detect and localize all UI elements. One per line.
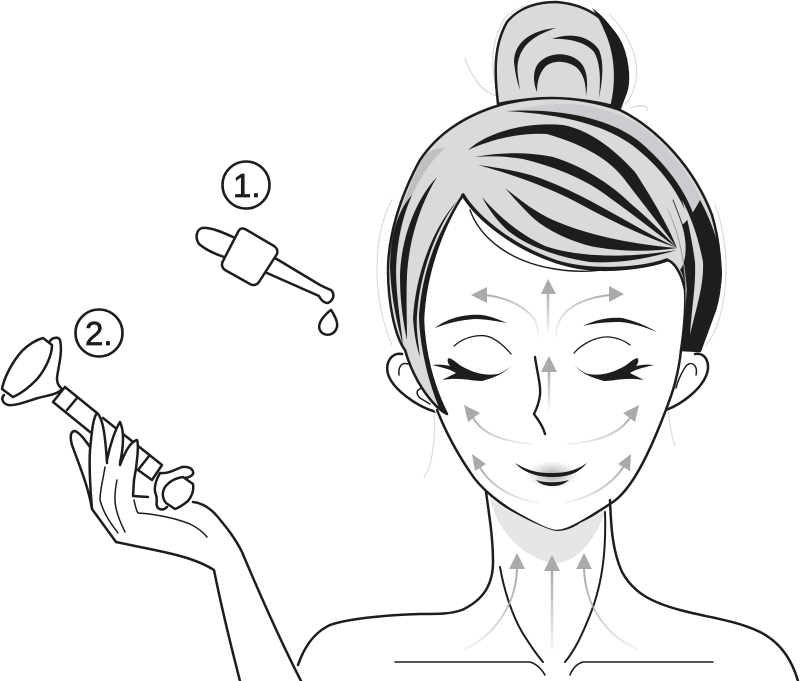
arrow: forehead centre bbox=[541, 279, 556, 336]
arrow: forehead left bbox=[471, 287, 538, 336]
neck and shoulders bbox=[298, 492, 798, 681]
arrow: left chin bbox=[472, 454, 538, 503]
arrow: nose bbox=[541, 356, 557, 414]
neck shading bbox=[490, 498, 606, 563]
icon: left ear bbox=[387, 354, 436, 412]
arrow: right cheek bbox=[568, 405, 639, 444]
icon: face roller bbox=[2, 338, 193, 510]
closed eyes with lashes bbox=[432, 358, 654, 381]
nose bbox=[534, 357, 545, 434]
hair left strands bbox=[400, 177, 437, 340]
step 1 badge: 1. bbox=[233, 167, 261, 204]
arrow: right chin bbox=[563, 454, 631, 503]
icon: right ear bbox=[666, 354, 708, 410]
hair right strands bbox=[673, 200, 693, 285]
step 2 badge bbox=[76, 310, 122, 356]
step 2 badge: 2. bbox=[85, 315, 113, 352]
hair fringe edge bbox=[463, 195, 667, 269]
hair bbox=[388, 98, 722, 414]
hair arc strand bbox=[507, 110, 701, 310]
stray hair strands bbox=[377, 3, 726, 478]
eyebrows bbox=[435, 315, 657, 332]
arrow: neck left bbox=[465, 553, 525, 649]
eyelid lines bbox=[454, 336, 630, 354]
step 1 badge bbox=[222, 162, 270, 208]
lips bbox=[515, 461, 587, 489]
icon: hand and arm bbox=[71, 413, 301, 681]
hair strands across the fringe bbox=[468, 124, 677, 248]
hair band shading bbox=[507, 104, 716, 240]
arrow: left cheek bbox=[464, 405, 533, 444]
face outline bbox=[428, 195, 681, 531]
arrow: forehead right bbox=[556, 286, 624, 336]
arrow: neck right bbox=[576, 553, 637, 649]
icon: hair bun bbox=[496, 2, 628, 109]
icon: dropper bbox=[197, 228, 337, 335]
arrow: neck centre bbox=[544, 555, 560, 648]
